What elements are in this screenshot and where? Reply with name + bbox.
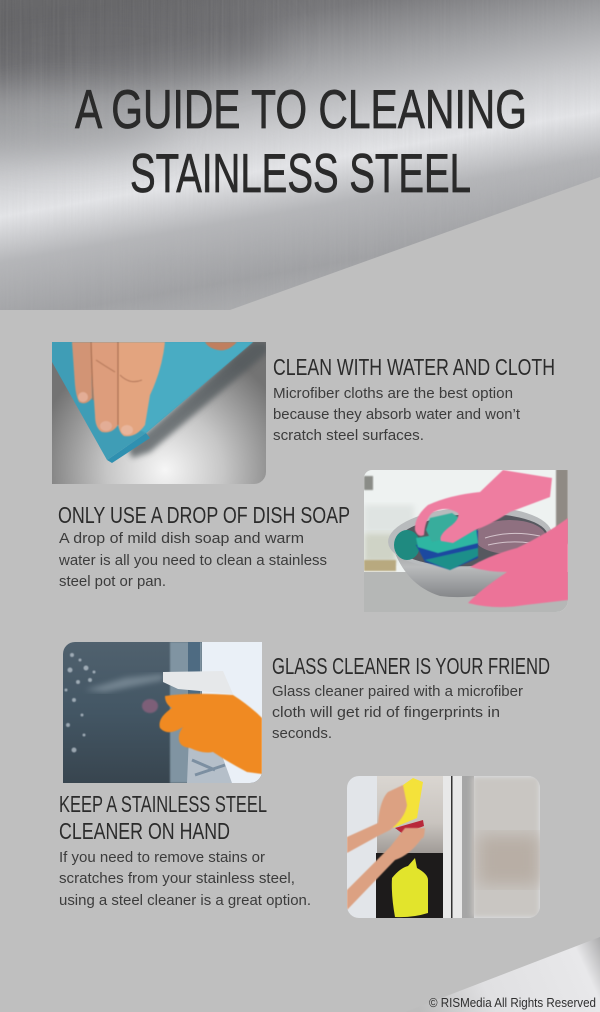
photo: pink gloves washing a bowl [364, 469, 568, 612]
title [75, 78, 527, 204]
text: glass cleaner is your friend: Glass cleaner paired with a microfiber [272, 683, 523, 700]
photo: hands cleaning a fridge with yellow spray [347, 776, 540, 918]
text: clean with water and cloth [273, 385, 521, 444]
orange glove [160, 694, 262, 774]
photo: hand wiping steel with blue cloth [52, 342, 268, 484]
bowl [386, 503, 554, 597]
heading: only use a drop of dish soap: ONLY USE A DROP OF DISH SOAP [58, 502, 350, 528]
gloves [415, 470, 568, 607]
text: only use a drop of dish soap: A drop of mild dish soap and warm [59, 530, 304, 547]
sponge [416, 513, 478, 570]
mist [85, 674, 163, 692]
text: clean with water and cloth: because they absorb water and won’t [273, 406, 521, 423]
red spray head [395, 820, 424, 834]
header panel: brushed steel [0, 0, 600, 310]
heading: keep a stainless steel cleaner on hand: CLEANER ON HAND [59, 818, 230, 844]
text: keep a stainless steel cleaner on hand: using a steel cleaner is a great option. [59, 892, 311, 909]
yellow cloth [392, 778, 423, 828]
heading: keep a stainless steel cleaner on hand [59, 791, 267, 844]
yellow spray bottle [392, 858, 428, 917]
text: only use a drop of dish soap: water is all you need to clean a stainless [58, 552, 327, 569]
text: keep a stainless steel cleaner on hand [59, 849, 311, 909]
spray bottle [163, 671, 233, 783]
text: clean with water and cloth: scratch steel surfaces. [273, 427, 424, 444]
heading: keep a stainless steel cleaner on hand: KEEP A STAINLESS STEEL [59, 791, 267, 817]
footer wedge [405, 937, 600, 1012]
arms and hands [347, 785, 425, 910]
water droplets [64, 653, 96, 752]
fingers [72, 342, 237, 436]
text: glass cleaner is your friend: seconds. [272, 725, 332, 742]
text: keep a stainless steel cleaner on hand: scratches from your stainless steel, [59, 870, 295, 887]
text: clean with water and cloth: Microfiber cloths are the best option [273, 385, 513, 402]
photo: orange glove with spray bottle at window [63, 642, 262, 783]
text: only use a drop of dish soap [58, 530, 327, 590]
text: only use a drop of dish soap: steel pot or pan. [59, 573, 166, 590]
text: glass cleaner is your friend [272, 683, 523, 742]
text: keep a stainless steel cleaner on hand: If you need to remove stains or [59, 849, 265, 866]
text: glass cleaner is your friend: cloth will get rid of fingerprints in [272, 704, 500, 721]
